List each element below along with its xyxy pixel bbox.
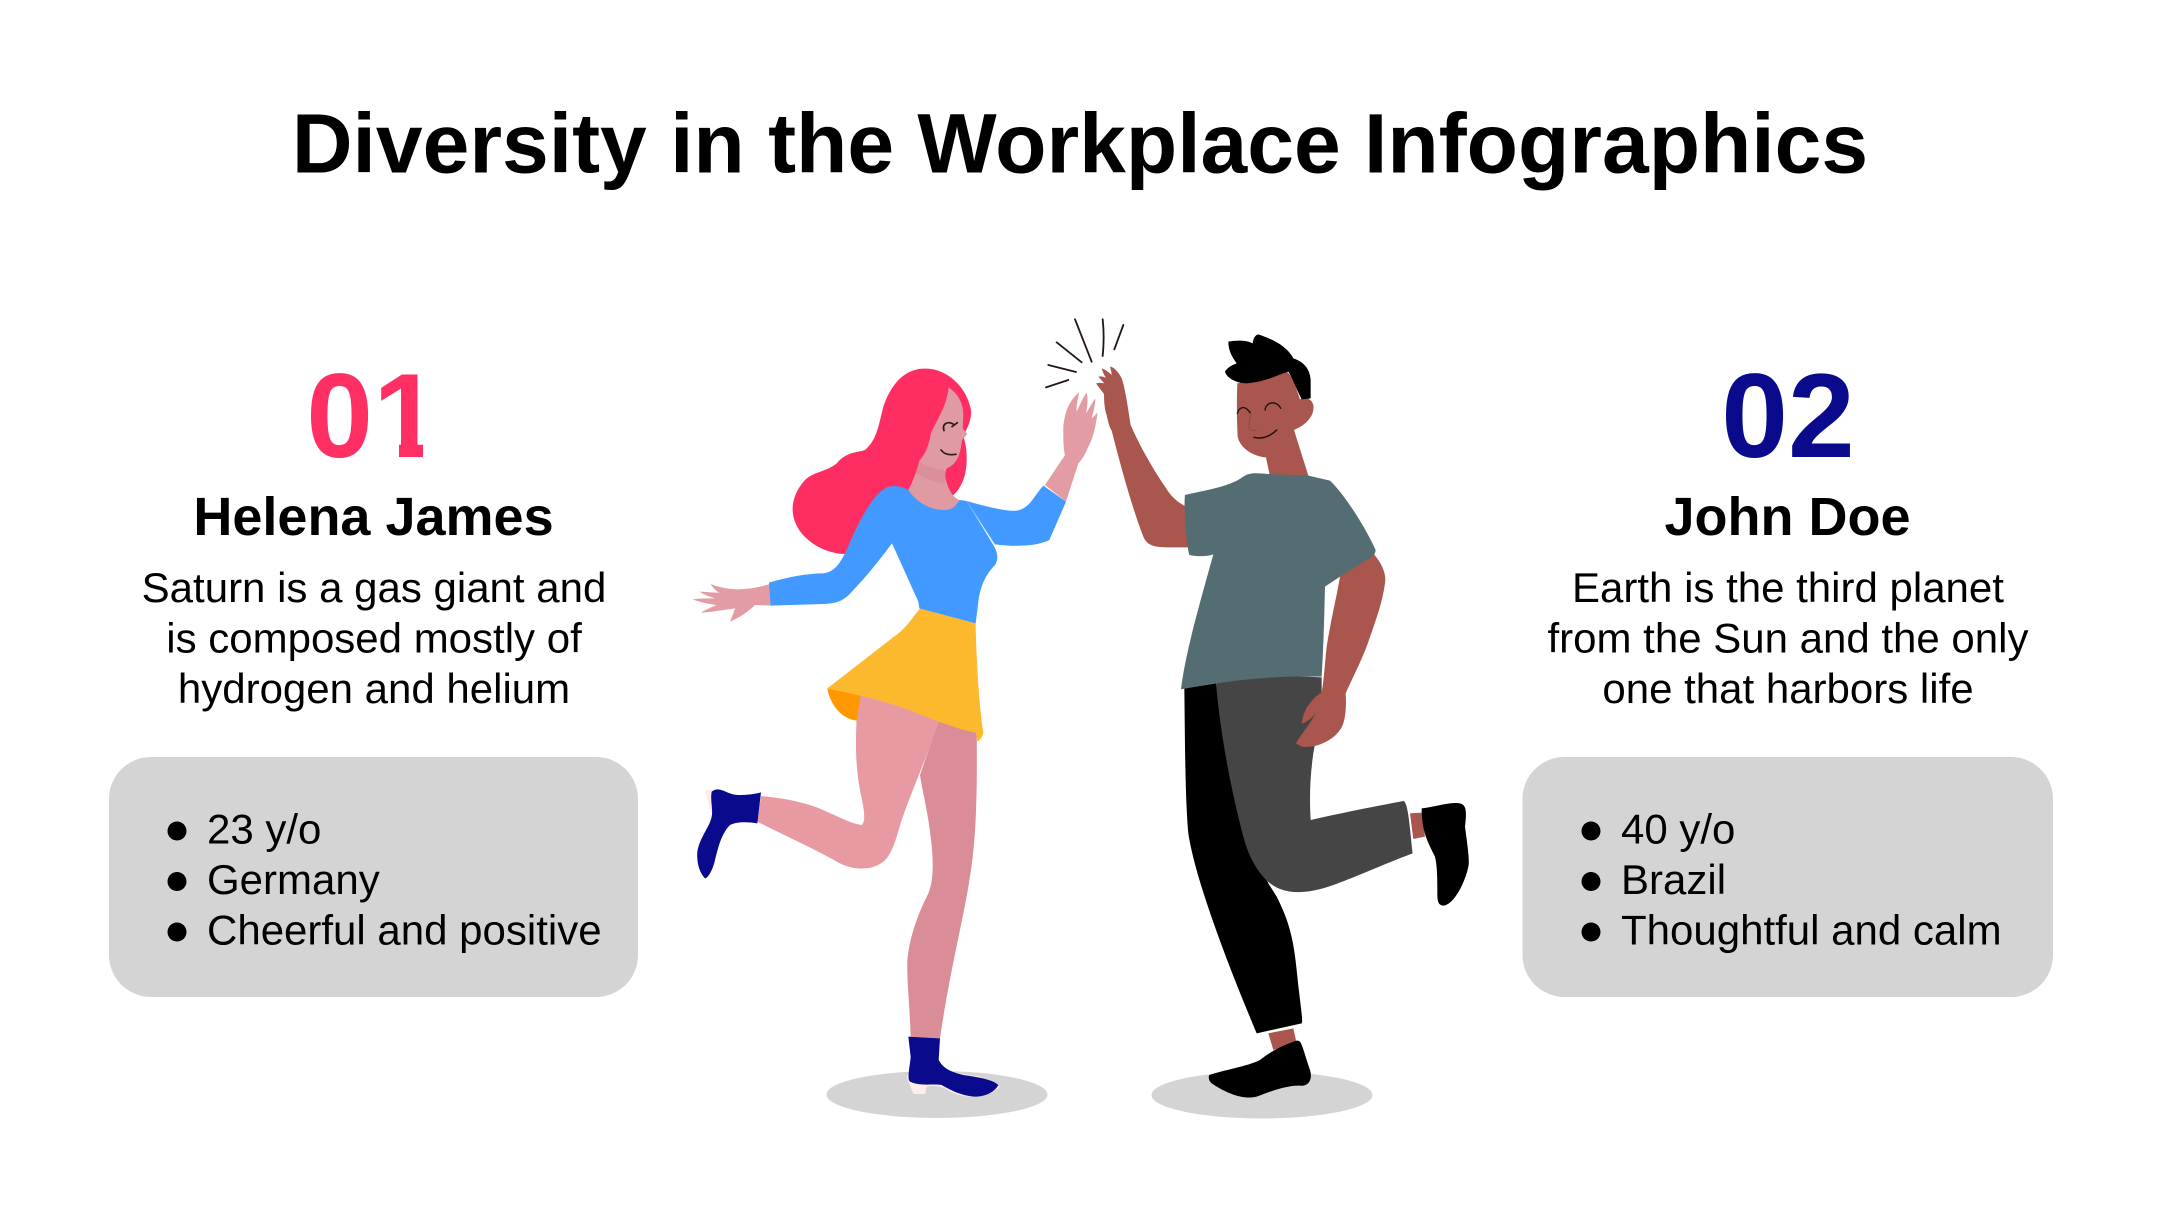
- card: John facts: [1522, 757, 2053, 997]
- bullet list: Helena facts: Cheerful and positive: [207, 906, 602, 954]
- man eyes: [1237, 403, 1281, 413]
- panel: person 01 Helena James: [109, 349, 638, 997]
- description: John: one that harbors life: [1602, 665, 1974, 712]
- title: Diversity in the Workplace Infographics: [292, 96, 1868, 190]
- woman skirt underside: [827, 688, 861, 721]
- woman standing leg: [907, 722, 977, 1038]
- illustration: woman: [693, 369, 1097, 1097]
- man arm on hip: [1296, 553, 1385, 747]
- woman boots: [697, 789, 1000, 1097]
- description: John: from the Sun and the only: [1548, 614, 2028, 662]
- name: Helena James: Helena James: [193, 487, 554, 547]
- bullet list: John facts: Thoughtful and calm: [1621, 906, 2002, 954]
- bullet list: Helena facts: [168, 806, 602, 954]
- man mouth: [1254, 430, 1277, 438]
- bullet list: John facts: Brazil: [1621, 856, 1726, 903]
- woman hair: [793, 369, 971, 554]
- panel: person 02 John Doe: [1522, 349, 2053, 997]
- description: Helena: Saturn is a gas giant and: [142, 564, 606, 611]
- illustration: man: [1096, 334, 1469, 1098]
- number 01: 01: [306, 349, 440, 483]
- woman face and neck: [907, 387, 967, 520]
- man legs and shoes: [1184, 676, 1469, 1098]
- bullet list: John facts: [1582, 806, 2002, 954]
- woman raised leg: [757, 693, 947, 869]
- woman outstretched hand: [693, 584, 772, 622]
- bullet list: Helena facts: 23 y/o: [207, 806, 321, 852]
- illustration: ground shadows: [826, 1071, 1372, 1118]
- woman skirt: [827, 608, 983, 742]
- name: John Doe: John Doe: [1664, 487, 1911, 547]
- woman sleeve seam: [967, 501, 995, 544]
- woman sleeve: [967, 486, 1066, 546]
- number 02: 02: [1721, 349, 1855, 483]
- man hair: [1225, 334, 1311, 399]
- woman eye: [944, 423, 957, 431]
- man shirt: [1181, 473, 1376, 689]
- description: Helena: is composed mostly of: [166, 614, 582, 662]
- man head and neck: [1237, 372, 1314, 477]
- woman mouth: [941, 450, 956, 455]
- description: John: Earth is the third planet: [1572, 564, 2004, 611]
- description: Helena: hydrogen and helium: [178, 665, 570, 712]
- woman raised arm and hand: [1045, 392, 1097, 502]
- bullet list: John facts: 40 y/o: [1621, 806, 1735, 852]
- card: Helena facts: [109, 757, 638, 997]
- man nose: [1249, 410, 1257, 430]
- bullet list: Helena facts: Germany: [207, 856, 380, 903]
- man raised arm: [1096, 367, 1190, 547]
- woman blue top: [769, 486, 997, 623]
- illustration: high-five spark lines: [1046, 319, 1123, 387]
- woman neck shade: [916, 462, 945, 484]
